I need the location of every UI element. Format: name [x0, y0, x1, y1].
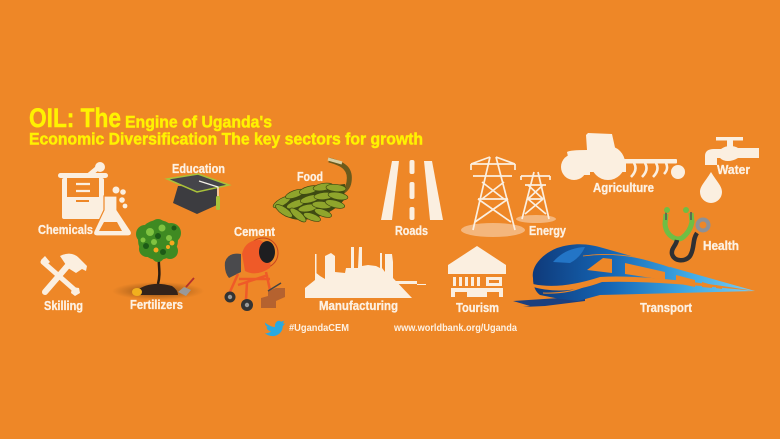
- icon: banana bunch: [272, 159, 349, 224]
- title: Economic Diversification The key sectors for growth: [29, 130, 423, 148]
- label: roads: Roads: [395, 224, 428, 238]
- label: tourism: Tourism: [456, 301, 499, 315]
- label: food: Food: [297, 170, 323, 184]
- label: skilling: Skilling: [44, 299, 83, 313]
- icon: roads: [381, 160, 443, 220]
- icon: high-speed train: [513, 244, 755, 307]
- label: manufacturing: Manufacturing: [319, 299, 398, 313]
- icon: manufacturing plant: [305, 247, 426, 298]
- icon: chemicals: [58, 162, 132, 236]
- label: health: Health: [703, 239, 739, 253]
- icon: energy pylons: [461, 157, 556, 237]
- label: cement: Cement: [234, 225, 276, 239]
- label: water: Water: [717, 163, 750, 177]
- label: fertilizers: Fertilizers: [130, 298, 183, 312]
- label: education: Education: [172, 162, 225, 176]
- title: [29, 103, 423, 148]
- icon: tractor: [561, 133, 685, 180]
- icon: cement mixer: [224, 238, 285, 311]
- title: OIL: The: [29, 103, 121, 133]
- icon: twitter bird: [265, 321, 285, 336]
- icon: stethoscope: [664, 207, 708, 260]
- icon: tourism hut: [448, 246, 506, 297]
- label: chemicals: Chemicals: [38, 223, 93, 237]
- title: Engine of Uganda's: [125, 112, 272, 132]
- hashtag: #UgandaCEM: [289, 322, 349, 334]
- label: agriculture: Agriculture: [593, 181, 654, 195]
- label: transport: Transport: [640, 301, 693, 315]
- icon: water tap: [700, 137, 759, 203]
- icon: graduation cap: [167, 174, 229, 214]
- icon: orange tree: [112, 219, 204, 300]
- website: www.worldbank.org/Uganda: [393, 322, 517, 334]
- icon: hammer and wrench: [41, 254, 87, 296]
- label: energy: Energy: [529, 224, 566, 238]
